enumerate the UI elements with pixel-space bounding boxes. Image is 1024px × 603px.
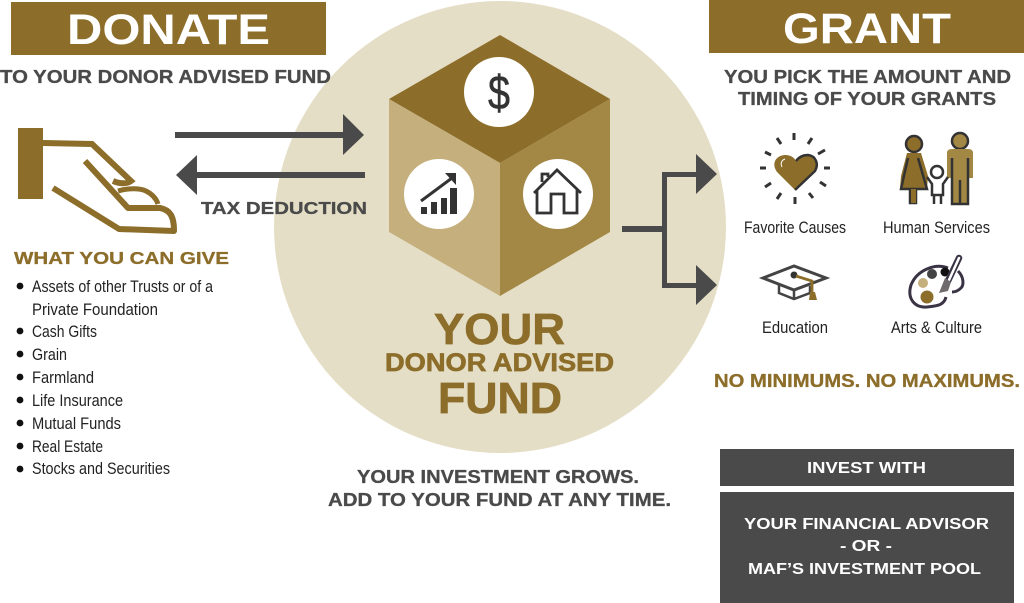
donate subheading: TO YOUR DONOR ADVISED FUND: [0, 67, 331, 87]
icon: family: [900, 133, 973, 204]
invest options: - OR -: [840, 538, 892, 555]
arrow: tax deduction back: [176, 155, 365, 195]
grant heading banner: [709, 0, 1024, 53]
icon: heart: [760, 133, 830, 204]
your donor advised fund title: FUND: [438, 374, 562, 423]
list of giving options: [17, 277, 213, 478]
icon: graduation cap: [763, 266, 826, 300]
donate heading banner: DONATE: [67, 6, 270, 54]
invest with header: INVEST WITH: [807, 460, 926, 477]
invest options: YOUR FINANCIAL ADVISOR: [744, 516, 989, 533]
list of giving options: Farmland: [32, 368, 94, 387]
investment growth note: [328, 467, 671, 510]
icon: paint palette: [910, 258, 963, 307]
your donor advised fund title: DONOR ADVISED: [385, 349, 614, 377]
your donor advised fund title: [385, 305, 614, 423]
icon: giving hand: [18, 128, 174, 231]
panel: donate: [0, 2, 331, 478]
list of giving options: Grain: [32, 345, 67, 364]
list of giving options: Mutual Funds: [32, 414, 121, 433]
education label: Education: [762, 318, 828, 337]
grant subheading: TIMING OF YOUR GRANTS: [738, 89, 996, 109]
what you can give heading: WHAT YOU CAN GIVE: [14, 248, 229, 268]
panel: invest with: [720, 449, 1014, 603]
grant heading banner: GRANT: [783, 5, 951, 53]
invest options: [720, 492, 1014, 603]
central background circle: [274, 1, 726, 453]
your donor advised fund title: YOUR: [434, 305, 565, 354]
list of giving options: Assets of other Trusts or of a: [32, 277, 213, 296]
icon: fund cube: [389, 35, 610, 296]
list of giving options: Real Estate: [32, 437, 103, 456]
invest options: MAF’S INVESTMENT POOL: [748, 561, 981, 578]
grant subheading: [724, 67, 1011, 109]
invest with header: [720, 449, 1014, 486]
icon: house: [523, 159, 593, 229]
arrow: donation to fund: [175, 114, 364, 155]
grant subheading: YOU PICK THE AMOUNT AND: [724, 67, 1011, 87]
arrow: branching grants: [622, 154, 717, 305]
tax deduction label: TAX DEDUCTION: [201, 198, 367, 218]
investment growth note: YOUR INVESTMENT GROWS.: [357, 467, 639, 487]
arts and culture label: Arts & Culture: [891, 318, 982, 337]
human services label: Human Services: [883, 218, 990, 237]
favorite causes label: Favorite Causes: [744, 218, 846, 237]
donate heading banner: [11, 2, 326, 55]
list of giving options: Cash Gifts: [32, 322, 97, 341]
no minimums statement: NO MINIMUMS. NO MAXIMUMS.: [714, 371, 1020, 391]
panel: grant: [709, 0, 1024, 391]
icon: dollar: $: [488, 67, 510, 120]
icon: dollar: [464, 57, 534, 127]
investment growth note: ADD TO YOUR FUND AT ANY TIME.: [328, 490, 671, 510]
list of giving options: Private Foundation: [32, 300, 158, 319]
icon: growth chart: [404, 159, 474, 229]
list of giving options: Life Insurance: [32, 391, 123, 410]
list of giving options: Stocks and Securities: [32, 459, 170, 478]
